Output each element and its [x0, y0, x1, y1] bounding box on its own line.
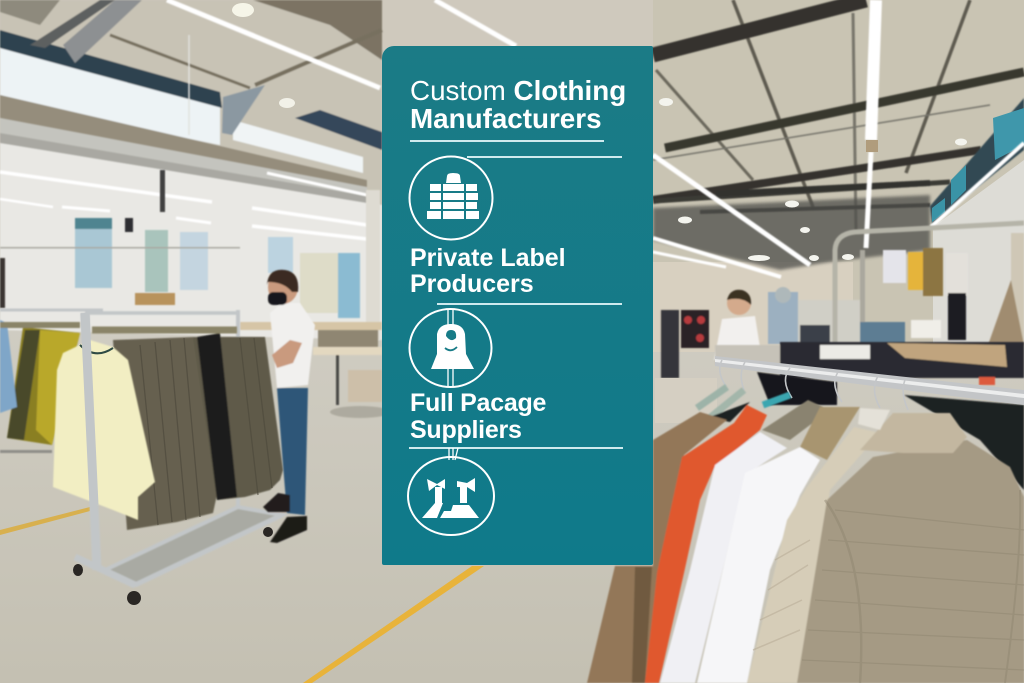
right ceiling beams: [653, 0, 1024, 232]
rack post over jacket: [85, 313, 94, 505]
right hall ceiling: [653, 0, 1024, 345]
worker: [263, 270, 315, 543]
far floor: [655, 378, 717, 423]
left lights: [0, 0, 516, 239]
label: private label producers: Private Label: [410, 244, 566, 272]
label: private label producers: [410, 244, 566, 298]
icon: factory machines: [407, 448, 495, 536]
left hall: ceiling, windows, wall: [0, 0, 382, 340]
right far wall: [653, 262, 853, 352]
icon: stacked boxes: [408, 156, 494, 240]
sweater texture: [802, 490, 1024, 683]
man in far background: [714, 290, 762, 360]
rack: [0, 310, 282, 585]
divider rules: [410, 140, 604, 142]
back tables and boxes: [240, 322, 390, 418]
far shop floor clothes above rail: [715, 342, 1024, 385]
floor yellow lines: [303, 566, 484, 683]
panel: teal supplier types: [382, 46, 653, 565]
label: full package suppliers: Suppliers: [410, 416, 522, 444]
far store contents: [661, 223, 1024, 378]
label: private label producers: Producers: [410, 270, 534, 298]
right side wall with teal windows: [933, 160, 1024, 345]
label: full package suppliers: [410, 389, 546, 444]
dark garments on rack: [92, 330, 283, 530]
floor: [0, 300, 1024, 683]
far ceiling cluster: [653, 195, 930, 270]
heading: Manufacturers: [410, 102, 602, 134]
heading: Custom Clothing: [410, 75, 626, 106]
cream jacket: [53, 340, 155, 520]
label: full package suppliers: Full Pacage: [410, 389, 546, 417]
left hanging clothes: [0, 320, 80, 453]
foreground garments: [587, 387, 1024, 683]
left wall windows: [0, 170, 380, 340]
heading: [410, 75, 626, 134]
right lights: [653, 0, 1024, 277]
foreground rail: [715, 356, 1024, 405]
icon: garment figure: [408, 308, 492, 388]
foreground dark garments behind hangers: [757, 372, 837, 405]
